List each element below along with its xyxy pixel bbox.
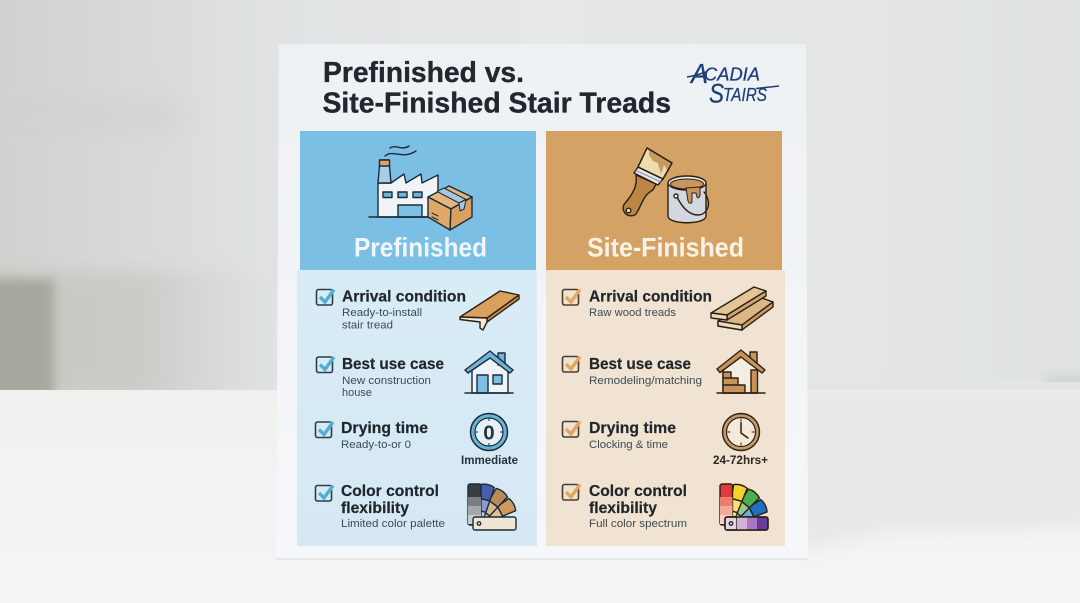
row: color control flexibility: [562, 483, 687, 530]
row: drying time: Clocking & time: [589, 439, 668, 451]
icon: paint brush: [623, 148, 672, 216]
board: [276, 44, 808, 560]
panel: prefinished: [297, 131, 537, 546]
title: Site-Finished Stair Treads: [322, 88, 671, 120]
icon: paint can: [668, 176, 708, 223]
row: drying time: Drying time: [589, 420, 676, 437]
icon: stair tread: [460, 291, 519, 330]
row: best use case: house: [342, 387, 372, 399]
row: best use case: Best use case: [589, 356, 691, 373]
site-finished body background: [546, 270, 785, 546]
icon: full colour fan: [720, 483, 768, 530]
label: Prefinished: Prefinished: [354, 232, 487, 262]
row: color control flexibility: flexibility: [341, 500, 409, 517]
row: drying time: Drying time: [341, 420, 428, 437]
site-finished header background: [546, 131, 782, 270]
row: drying time: [562, 420, 676, 451]
row: color control flexibility: [316, 483, 445, 530]
icon: house: [465, 351, 513, 393]
row: color control flexibility: Color control: [589, 483, 687, 500]
panel: site-finished: [546, 131, 785, 546]
label: Immediate: Immediate: [461, 455, 518, 467]
icon: timer at zero: 0: [483, 422, 495, 444]
checkbox: [316, 290, 334, 305]
icon: limited colour fan: [468, 483, 517, 530]
background: white table surface: [0, 382, 1080, 603]
row: drying time: Ready-to-or 0: [341, 439, 411, 451]
row: best use case: New construction: [342, 375, 431, 387]
title: Prefinished vs.: [323, 57, 524, 89]
icon: factory with box: [369, 146, 472, 230]
row: arrival condition: Arrival condition: [342, 288, 466, 306]
checkbox: [316, 357, 334, 372]
row: arrival condition: [316, 288, 466, 332]
row: arrival condition: [562, 288, 712, 319]
logo: Acadia Stairs: S: [709, 78, 724, 108]
checkbox: [562, 356, 580, 372]
row: arrival condition: Ready-to-install: [342, 307, 422, 319]
row: drying time: [316, 420, 428, 451]
icon: timer at zero: [470, 414, 508, 450]
row: best use case: [316, 356, 444, 399]
row: best use case: [562, 356, 702, 387]
logo: Acadia Stairs: CADIA: [704, 64, 760, 84]
checkbox: [316, 486, 333, 501]
row: color control flexibility: flexibility: [589, 500, 657, 517]
icon: remodel house with stairs: [717, 350, 765, 393]
row: arrival condition: Arrival condition: [589, 288, 712, 306]
logo: Acadia Stairs: [687, 58, 779, 108]
logo: Acadia Stairs: A: [689, 58, 708, 89]
prefinished header background: [300, 131, 536, 270]
row: arrival condition: stair tread: [342, 320, 393, 332]
label: 24-72hrs+: 24-72hrs+: [713, 455, 768, 467]
checkbox: [562, 422, 580, 437]
icon: raw wood planks: [711, 287, 773, 330]
logo: Acadia Stairs: TAIRS: [723, 85, 767, 105]
row: color control flexibility: Color control: [341, 483, 439, 500]
row: arrival condition: Raw wood treads: [589, 307, 676, 319]
label: Site-Finished: Site-Finished: [587, 232, 744, 262]
row: best use case: Remodeling/matching: [589, 375, 702, 387]
row: color control flexibility: Limited color palette: [341, 518, 445, 530]
icon: wall clock: [722, 414, 760, 450]
prefinished body background: [297, 270, 537, 546]
checkbox: [562, 484, 580, 500]
background: blurred wall: [0, 0, 1080, 397]
checkbox: [562, 290, 580, 305]
checkbox: [316, 422, 333, 438]
title: [322, 57, 671, 120]
row: color control flexibility: Full color spectrum: [589, 518, 687, 530]
row: best use case: Best use case: [342, 356, 444, 373]
